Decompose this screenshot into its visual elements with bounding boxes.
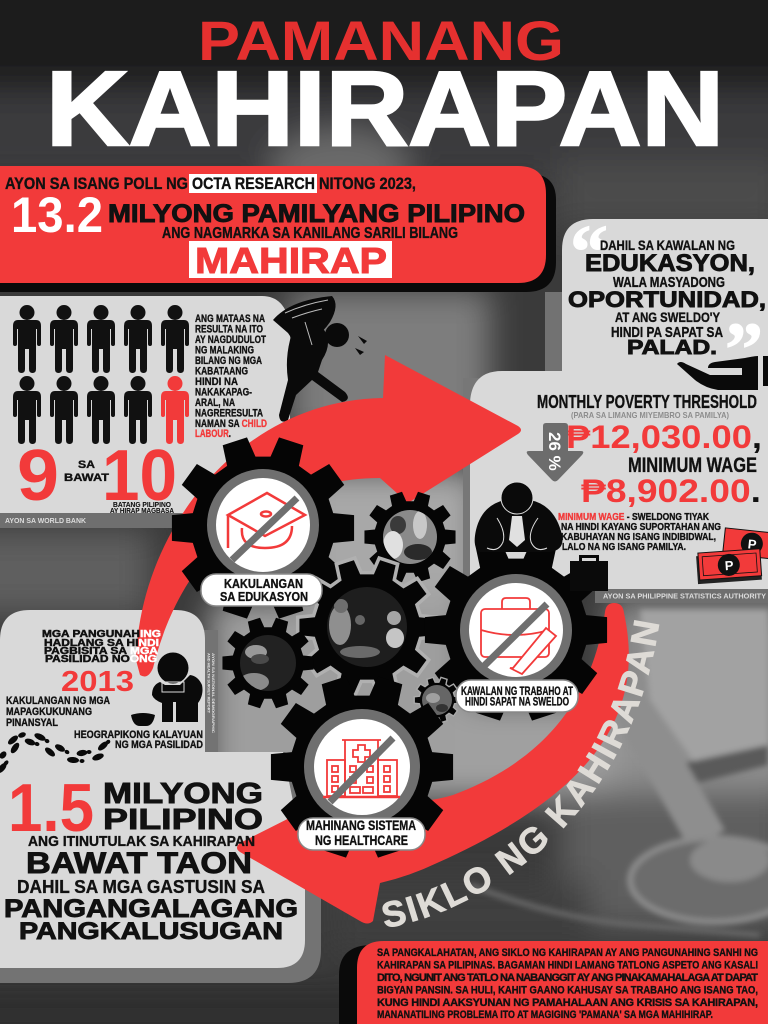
explanatory text: LABOUR. (195, 428, 231, 440)
caption (110, 502, 174, 515)
statistic 1.5: 1.5 (8, 770, 94, 846)
text: barriers to health visits: HADLANG SA HI NDI (44, 638, 159, 649)
quote lines: DAHIL SA KAWALAN NG (600, 237, 735, 253)
gear: weak healthcare (271, 676, 453, 858)
label pill: no jobs (456, 680, 578, 712)
explanatory text: KABATAANG (195, 366, 248, 378)
cost text block: MILYONG (103, 778, 263, 810)
icon: graduation cap (228, 493, 305, 548)
icon: hospital (323, 740, 400, 797)
OCTA Research highlight: OCTA RESEARCH (192, 174, 315, 193)
panel: child labour statistic (0, 296, 290, 528)
label pill: weak healthcare: NG HEALTHCARE (315, 832, 408, 848)
panel: OCTA poll headline (0, 166, 556, 292)
text: barriers to health visits: MGA PANGUNAH ING (42, 629, 161, 640)
explanatory text (195, 313, 267, 440)
icon: peso bills (696, 528, 768, 584)
barrier: distance: HEOGRAPIKONG KALAYUAN (74, 729, 203, 741)
panel: education quote (545, 210, 768, 392)
explanatory text: AY NAGDUDULOT (195, 334, 266, 346)
icon: footprints trail (0, 731, 111, 775)
label pill: no jobs: HINDI SAPAT NA SWELDO (465, 696, 569, 708)
explanatory text: NAGRERESULTA (195, 408, 263, 420)
sa bawat: BAWAT (64, 472, 109, 484)
barrier: distance: NG MGA PASILIDAD (115, 739, 203, 751)
explanatory text: BILANG NG MGA (195, 355, 262, 367)
explanatory text: NAKAKAPAG- (195, 386, 252, 398)
barrier: lack of funds (6, 695, 110, 729)
text: barriers to health visits (42, 629, 161, 665)
minimum wage amount: ₱8,902.00 . (581, 473, 761, 509)
explanatory text: NAMAN SA CHILD (195, 418, 267, 430)
Mahirap box: MAHIRAP (195, 240, 387, 281)
icon: 26 percent arrow (527, 423, 583, 482)
year text: NITONG 2023, (319, 174, 416, 193)
cycle title on curve: SIKLO NG KAHIRAPAN (382, 620, 660, 927)
cost text block: BAWAT TAON (26, 847, 252, 880)
gear: central photo (298, 558, 436, 696)
definition text: KABUHAYAN NG ISANG INDIBIDWAL, (561, 532, 716, 543)
panel: out-of-pocket health costs (0, 752, 321, 983)
definition text: MINIMUM WAGE - SWELDONG TIYAK (558, 512, 710, 523)
icon: black briefcase (570, 555, 608, 591)
statistic 9: 9 (17, 436, 59, 516)
sa bawat (64, 459, 109, 484)
quote lines: AT ANG SWELDO'Y (615, 309, 721, 325)
quote lines: WALA MASYADONG (613, 274, 725, 291)
source text (206, 653, 215, 734)
barrier: distance (74, 729, 203, 751)
icon: peso bills: P (724, 558, 734, 573)
statistic 13.2: 13.2 (11, 187, 103, 243)
icon: briefcase and pencil (481, 598, 556, 674)
threshold amount: ₱12,030.00 , (566, 419, 762, 455)
text: barriers to health visits: PASILIDAD NO ONG (45, 654, 157, 665)
icon: empty bowl (131, 713, 155, 726)
source strip (0, 513, 290, 528)
cost text block: ANG ITINUTULAK SA KAHIRAPAN (28, 833, 255, 850)
pictogram: nine of ten (13, 305, 189, 444)
icon: porter carrying a load (273, 296, 367, 422)
statistic 10: 10 (102, 436, 177, 516)
cost text block: DAHIL SA MGA GASTUSIN SA (17, 877, 265, 897)
caption: AY HIRAP MAGBASA (110, 508, 174, 515)
icon: 26 percent arrow: 26 % (545, 432, 564, 471)
conclusion paragraph: KUNG HINDI AAKSYUNAN NG PAMAHALAAN ANG KRISIS SA KAHIRAPAN, (377, 997, 758, 1009)
gear: small photo left (222, 618, 314, 708)
label pill: lack of education (201, 574, 322, 606)
conclusion paragraph (377, 947, 758, 1021)
gear: lack of work and low wage (425, 539, 607, 721)
icon: sitting child (152, 652, 202, 722)
barrier: lack of funds: KAKULANGAN NG MGA (6, 695, 110, 707)
icon: closing quote: ” (725, 308, 763, 392)
gear: small photo top (364, 492, 456, 582)
conclusion paragraph: DITO, NGUNIT ANG TATLO NA NABANGGIT AY ANG PINAKAMAHALAGA AT DAPAT (377, 972, 758, 984)
source strip: AYON SA PHILIPPINE STATISTICS AUTHORITY (603, 594, 766, 600)
caption: BATANG PILIPINO (113, 502, 172, 509)
label pill: lack of education: SA EDUKASYON (220, 589, 308, 604)
source text: AND HEALTH SURVEY REPORT (206, 653, 210, 714)
quote lines: EDUKASYON, (585, 250, 755, 277)
statistic year 2013: 2013 (61, 666, 134, 698)
icon: open hand (677, 356, 768, 390)
explanatory text: ANG MATAAS NA (195, 313, 265, 325)
cost text block: PILIPINO (103, 804, 263, 836)
sa bawat: SA (78, 459, 95, 471)
title: Kahirapan: KAHIRAPAN (46, 50, 724, 168)
photo detail: shirt, arm and plate (470, 610, 768, 935)
icon: peso bills: P (747, 536, 758, 552)
source text: AYON SA NATIONAL DEMOGRAPHIC (211, 653, 215, 734)
arrow: upper cycle arrow (136, 355, 521, 676)
panel: poverty threshold and wage (463, 356, 768, 603)
definition text: LALO NA NG ISANG PAMILYA. (562, 542, 686, 553)
arrow: lower cycle arrow (237, 603, 629, 924)
threshold subheading: (PARA SA LIMANG MIYEMBRO SA PAMILYA) (571, 410, 729, 420)
definition text (558, 512, 721, 553)
cost text block: PANGKALUSUGAN (19, 918, 283, 945)
quote lines: PALAD. (627, 337, 717, 359)
cost text block (4, 778, 298, 945)
icon: slumped worker (475, 482, 562, 552)
panel: health barriers (0, 610, 218, 765)
gear: lack of education (172, 437, 354, 619)
explanatory text: RESULTA NA ITO (195, 324, 263, 336)
label pill: lack of education: KAKULANGAN (224, 576, 303, 591)
barrier: lack of funds: PINANSYAL (6, 717, 58, 729)
label pill: weak healthcare: MAHINANG SISTEMA (306, 817, 416, 833)
panel: conclusion (339, 941, 768, 1024)
nagmarka text: ANG NAGMARKA SA KANILANG SARILI BILANG (162, 225, 458, 242)
source strip: AYON SA WORLD BANK (5, 518, 86, 525)
milyong pamilyang pilipino: MILYONG PAMILYANG PILIPINO (108, 200, 525, 228)
definition text: NA HINDI KAYANG SUPORTAHAN ANG (561, 522, 721, 533)
gear: tiny photo (414, 677, 460, 723)
barrier: lack of funds: MAPAGKUKUNANG (6, 706, 92, 718)
icon: opening quote: “ (570, 210, 608, 294)
source strip (595, 589, 768, 603)
quote lines: HINDI PA SAPAT SA (611, 324, 723, 341)
text: barriers to health visits: PAGBISITA SA MGA (44, 646, 158, 657)
explanatory text: ARAL, NA (195, 397, 235, 409)
explanatory text: HINDI NA (195, 376, 238, 388)
explanatory text: NG MALAKING (195, 344, 254, 356)
title: Pamanang: PAMANANG (198, 9, 564, 72)
cost text block: PANGANGALAGANG (4, 895, 298, 923)
panel: out-of-pocket background (0, 752, 305, 968)
label pill: no jobs: KAWALAN NG TRABAHO AT (461, 686, 573, 698)
poll intro text: AYON SA ISANG POLL NG (5, 174, 188, 193)
quote lines (568, 237, 766, 359)
label pill: weak healthcare (298, 817, 425, 850)
quote lines: OPORTUNIDAD, (568, 287, 766, 312)
